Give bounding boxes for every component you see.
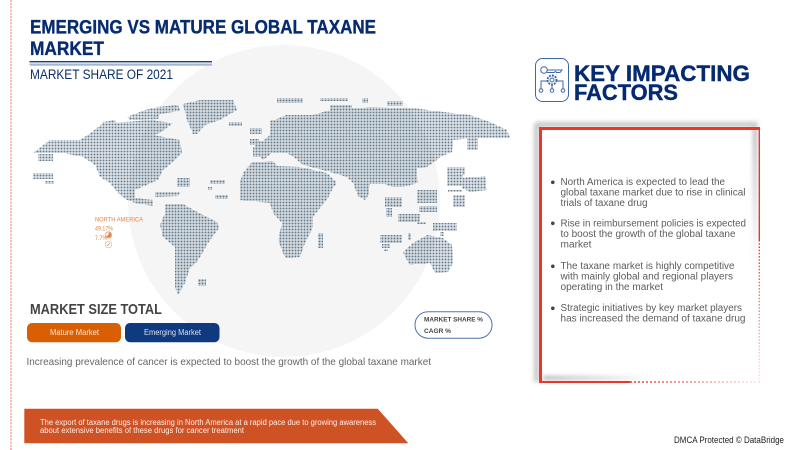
bullet four: has increased the demand of taxane drug	[560, 313, 746, 324]
bullet two: market	[560, 240, 592, 251]
legend: mature market: Mature Market	[50, 328, 100, 337]
bullet one	[551, 177, 746, 209]
bullet one: North America is expected to lead the	[560, 177, 725, 188]
left dotted border	[10, 0, 12, 450]
bullet one: global taxane market due to rise in clinical	[560, 188, 746, 198]
bullet three: The taxane market is highly competitive	[560, 261, 735, 272]
panel red frame	[539, 127, 760, 383]
legend pill: market share and CAGR: MARKET SHARE %	[424, 317, 483, 324]
icon: market share pie	[105, 232, 112, 238]
map: Caribbean	[155, 178, 228, 199]
map: Iberia and Africa	[240, 161, 337, 258]
map: Eurasia	[255, 107, 510, 200]
bullet four: Strategic initiatives by key market players	[560, 303, 742, 314]
map: Alaska islands and Hawaii	[33, 154, 54, 184]
map: South East Asia	[380, 190, 457, 251]
North America callout: NORTH AMERICA	[95, 218, 143, 224]
map: North America	[33, 120, 182, 206]
North America callout	[95, 218, 143, 248]
title: EMERGING VS MATURE GLOBAL TAXANE	[30, 16, 376, 38]
market size heading: MARKET SIZE TOTAL	[30, 301, 162, 318]
bullet three: with mainly global and regional players	[559, 271, 733, 282]
map: Australia and New Zealand	[403, 235, 453, 273]
subtitle: MARKET SHARE OF 2021	[30, 67, 173, 82]
market summary text: Increasing prevalence of cancer is expected to boost the growth of the global taxane market	[26, 356, 431, 368]
map: UK and Iceland	[250, 128, 262, 157]
title: MARKET	[30, 38, 104, 60]
map: Russian Arctic islands	[277, 98, 403, 110]
map: Greenland	[183, 100, 242, 134]
title underline	[30, 61, 212, 66]
key impacting factors heading: FACTORS	[574, 80, 678, 105]
bullet two	[551, 219, 746, 251]
panel shadow	[534, 122, 758, 382]
world dot map	[33, 98, 510, 295]
legend: emerging market	[125, 323, 220, 342]
bullet two: to boost the growth of the global taxane	[560, 229, 736, 240]
map: Arctic islands	[103, 105, 180, 126]
bullet one: trials of taxane drug	[560, 198, 648, 209]
map: South America	[160, 204, 219, 295]
title	[30, 16, 376, 60]
bullet three: operating in the market	[560, 282, 663, 293]
bullet list	[551, 177, 746, 324]
map: East Asia islands	[447, 137, 487, 207]
panel: key impacting factors	[534, 122, 760, 383]
North America callout: 7.7%	[95, 235, 107, 242]
bullet four	[551, 303, 746, 324]
banner callout	[24, 409, 408, 443]
legend pill: market share and CAGR: CAGR %	[424, 328, 451, 335]
map: Falklands	[198, 279, 206, 286]
banner callout: about extensive benefits of these drugs for cancer treatment	[40, 426, 245, 435]
map: Madagascar	[318, 233, 323, 248]
North America callout: 49.17%	[95, 226, 113, 232]
icon: CAGR badge	[105, 241, 112, 248]
banner callout: The export of taxane drugs is increasing in North America at a rapid pace due to growing awareness	[40, 418, 376, 427]
key impacting factors heading	[574, 61, 750, 105]
bullet two: Rise in reimbursement policies is expected	[560, 219, 746, 230]
legend pill: market share and CAGR	[415, 312, 492, 338]
legend: mature market	[27, 323, 121, 342]
icon: key and gear network	[536, 58, 568, 102]
bullet three	[551, 261, 735, 293]
background circle behind map	[128, 45, 440, 357]
legend: emerging market: Emerging Market	[144, 328, 202, 337]
key impacting factors heading: KEY IMPACTING	[574, 61, 750, 86]
